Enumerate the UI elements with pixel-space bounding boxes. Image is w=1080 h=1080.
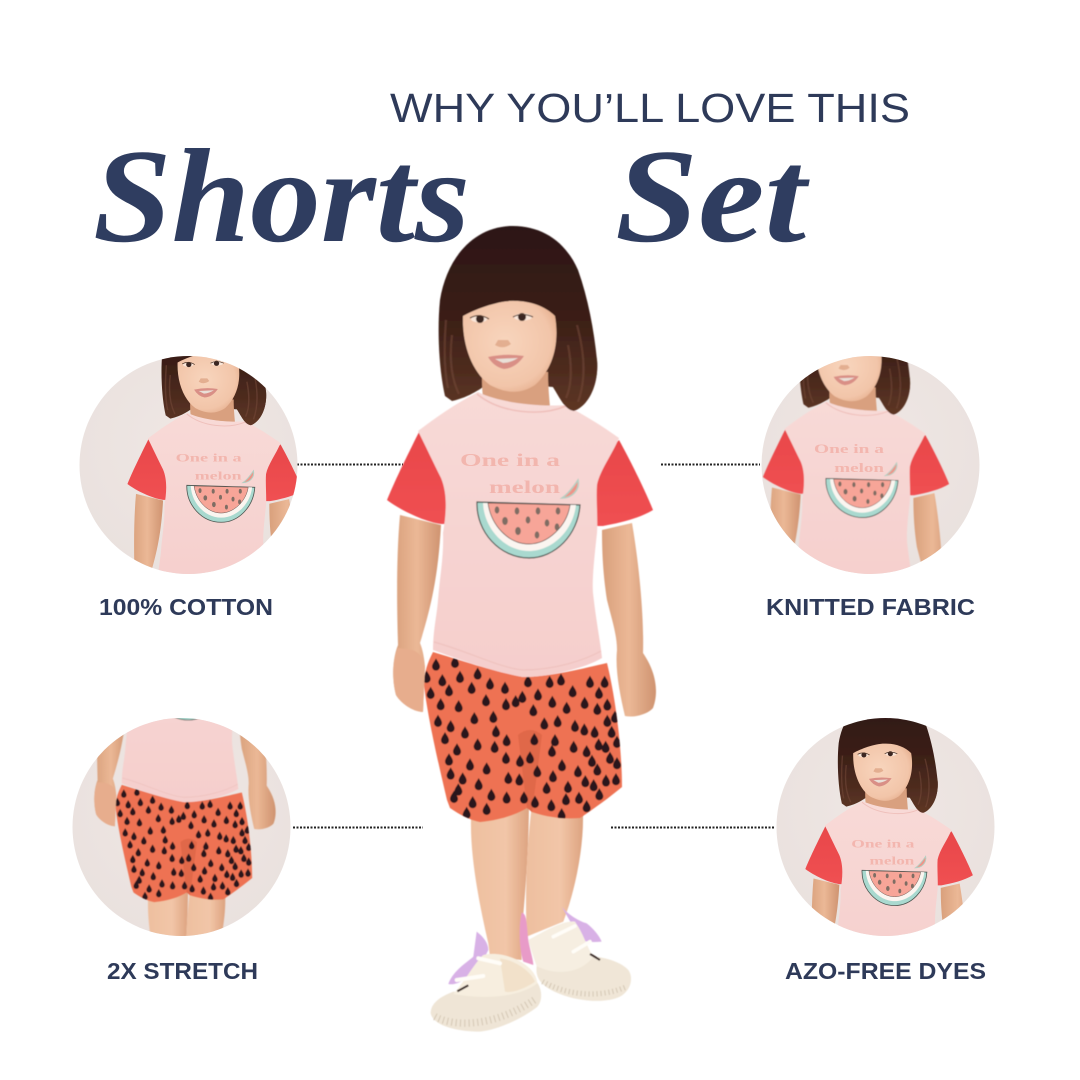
photo: circle knitted fabric: One in a [814,442,885,456]
photo: circle 2x stretch [72,718,290,936]
photo: circle knitted fabric: melon [834,461,884,475]
label: 100% cotton: 100% COTTON [99,594,273,620]
connector: knitted fabric [661,464,760,466]
photo: child wearing shorts set: melon [489,477,560,497]
connector: cotton [297,464,403,466]
heading: Shorts: Shorts [93,122,470,270]
photo: circle azo-free dyes [776,718,994,936]
label: 2x stretch: 2X STRETCH [107,958,258,984]
photo: circle 100% cotton: melon [195,468,242,482]
photo: circle knitted fabric [762,356,980,574]
photo: circle azo-free dyes: melon [870,856,915,868]
label: knitted fabric: KNITTED FABRIC [766,594,975,620]
connector: stretch [293,826,423,828]
photo: circle azo-free dyes: One in a [851,839,915,851]
photo: child wearing shorts set: One in a [460,450,560,470]
photo: child wearing shorts set [387,226,656,1032]
photo: circle 100% cotton [80,356,298,574]
heading: Set: Set [615,122,810,270]
label: azo-free dyes: AZO-FREE DYES [785,958,986,984]
title: why you'll love this: WHY YOU’LL LOVE THIS [390,85,910,131]
photo: circle 100% cotton: One in a [176,451,242,465]
connector: azo-free dyes [611,826,775,828]
